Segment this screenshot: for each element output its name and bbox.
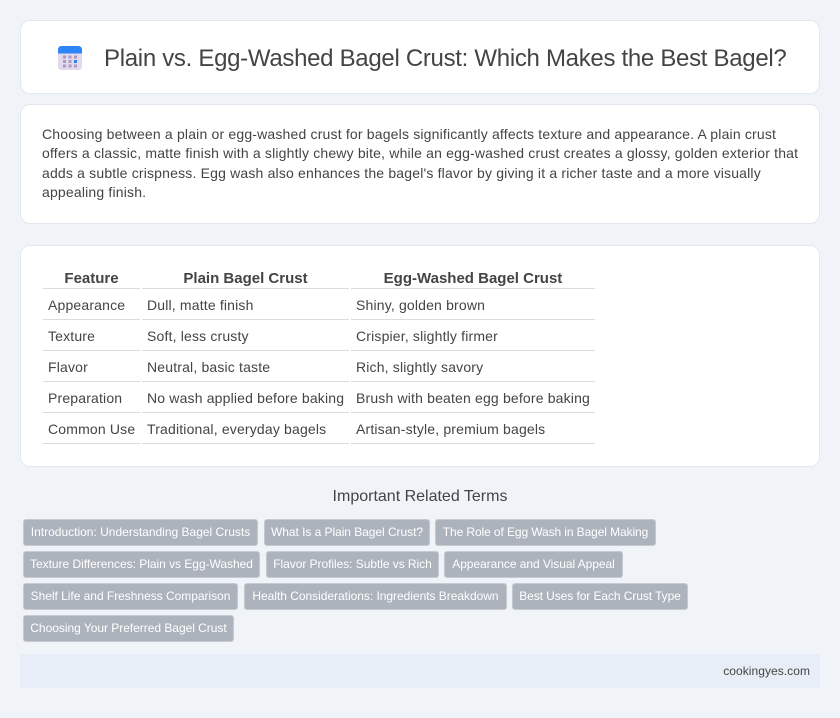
comparison table: Crispier, slightly firmer [356, 328, 498, 344]
related terms tags: Health Considerations: Ingredients Breakdown [252, 589, 499, 603]
comparison table: Flavor [48, 359, 88, 375]
comparison table: Common Use [48, 421, 135, 437]
comparison table: Artisan-style, premium bagels [356, 421, 545, 437]
related terms tags: Appearance and Visual Appeal [452, 557, 615, 571]
intro text: adds a subtle crispness. Egg wash also enhances the bagel's flavor by giving it a richer taste and a more visually [42, 165, 761, 181]
table panel [20, 245, 820, 467]
comparison table: Plain Bagel Crust [183, 270, 308, 287]
comparison table: Neutral, basic taste [147, 359, 270, 375]
intro text: offers a classic, matte finish with a slightly chewy bite, while an egg-washed crust creates a glossy, golden exterior that [42, 145, 798, 161]
comparison table: No wash applied before baking [147, 390, 344, 406]
comparison table: Soft, less crusty [147, 328, 249, 344]
intro panel [20, 104, 820, 224]
comparison table: Shiny, golden brown [356, 297, 485, 313]
related terms heading: Important Related Terms [333, 488, 507, 505]
related terms tags: What Is a Plain Bagel Crust? [271, 525, 423, 539]
related terms tags: Best Uses for Each Crust Type [519, 589, 681, 603]
related terms tags: Flavor Profiles: Subtle vs Rich [273, 557, 432, 571]
comparison table: Brush with beaten egg before baking [356, 390, 590, 406]
intro text: appealing finish. [42, 184, 146, 200]
intro text [42, 126, 798, 200]
related terms tags [23, 519, 688, 642]
icon: calendar [58, 46, 82, 70]
comparison table: Feature [64, 270, 119, 287]
comparison table: Egg-Washed Bagel Crust [384, 270, 562, 287]
comparison table: Traditional, everyday bagels [147, 421, 326, 437]
comparison table: Preparation [48, 390, 122, 406]
related terms tags: The Role of Egg Wash in Bagel Making [443, 525, 648, 539]
comparison table: Dull, matte finish [147, 297, 254, 313]
comparison table: Texture [48, 328, 95, 344]
related terms tags: Introduction: Understanding Bagel Crusts [31, 525, 250, 539]
comparison table [43, 270, 595, 444]
comparison table: Appearance [48, 297, 125, 313]
title: Plain vs. Egg-Washed Bagel Crust: Which Makes the Best Bagel? [104, 45, 786, 72]
comparison table: Rich, slightly savory [356, 359, 483, 375]
related terms tags: Choosing Your Preferred Bagel Crust [30, 621, 227, 635]
footer source: cookingyes.com [723, 664, 810, 678]
intro text: Choosing between a plain or egg-washed crust for bagels significantly affects texture and appearance. A plain crust [42, 126, 776, 142]
related terms tags: Texture Differences: Plain vs Egg-Washed [30, 557, 253, 571]
footer bar [20, 654, 820, 688]
related terms tags: Shelf Life and Freshness Comparison [31, 589, 230, 603]
header card [20, 20, 820, 94]
